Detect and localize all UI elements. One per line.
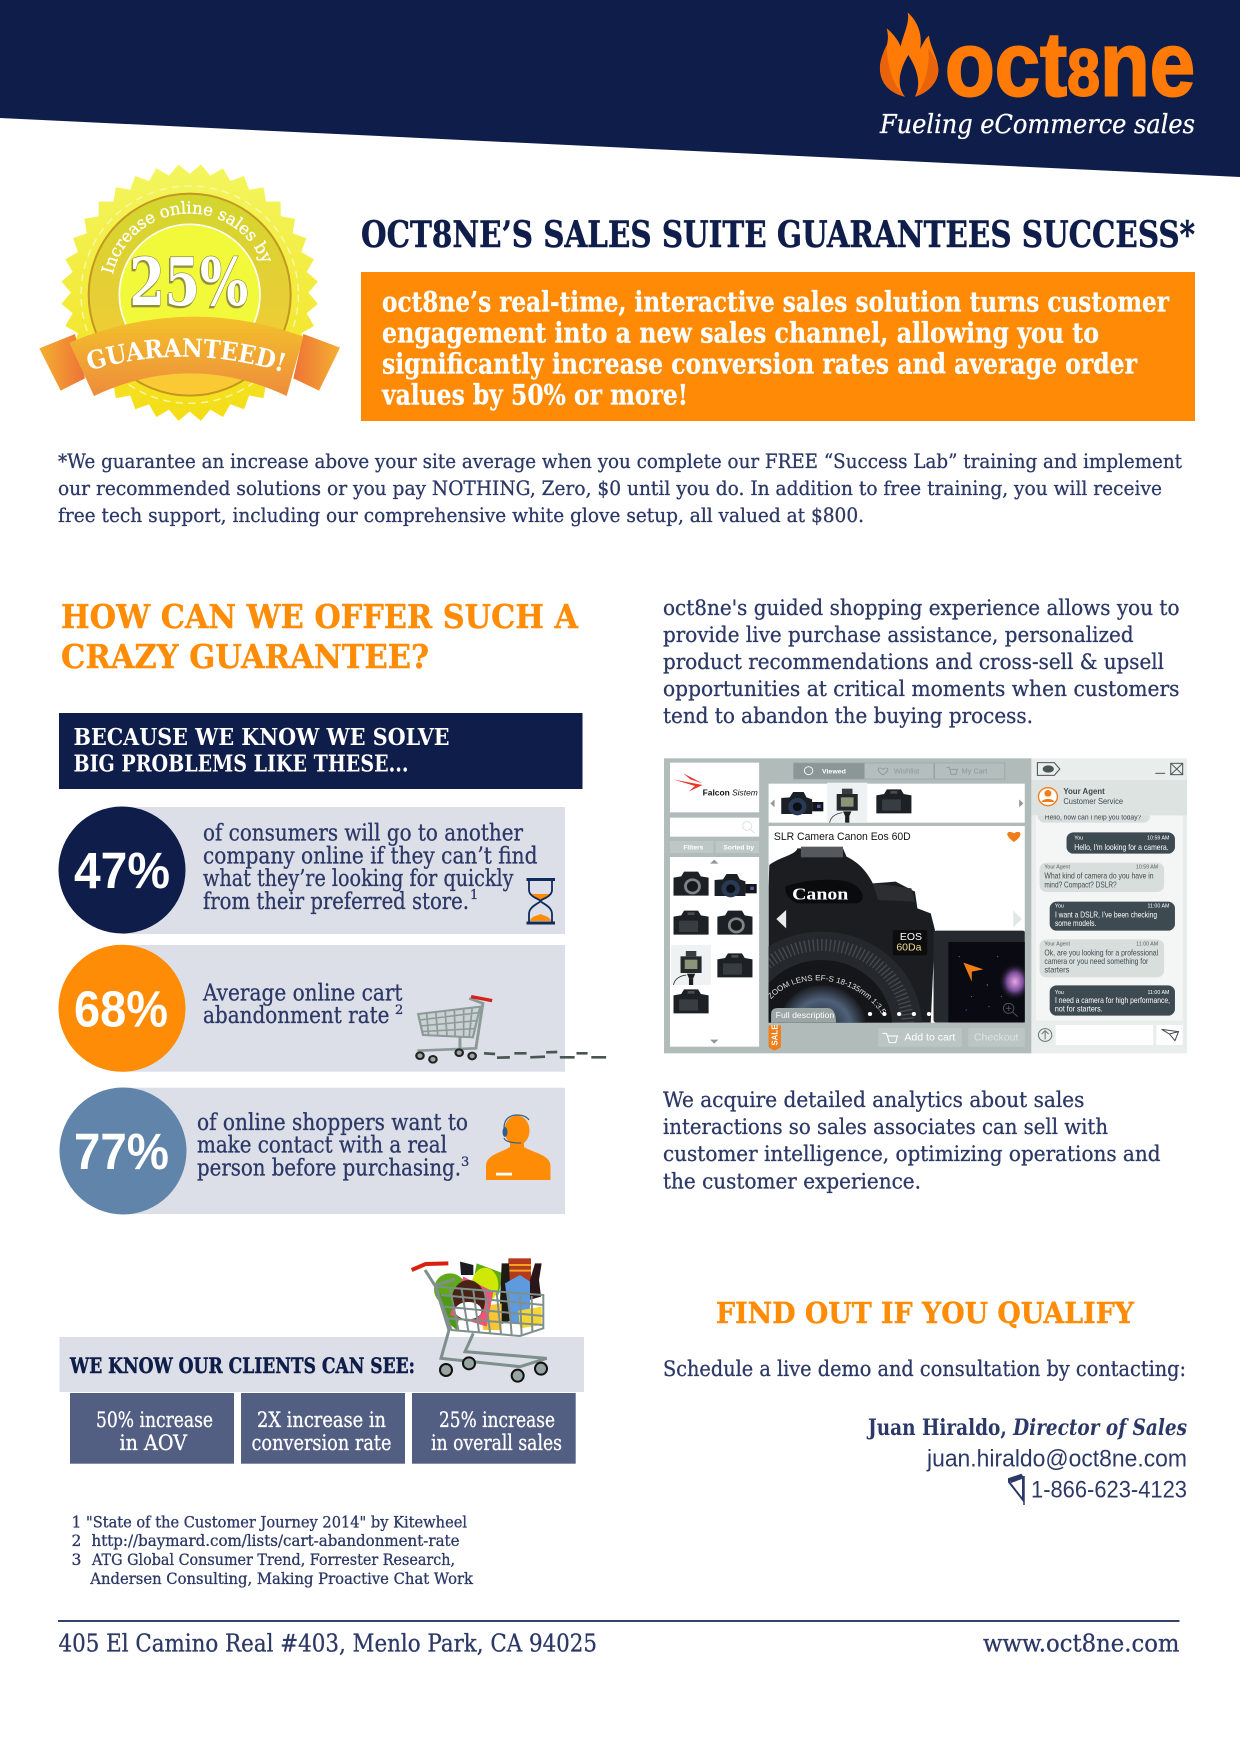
thumbnail list <box>670 857 759 1047</box>
stat text: of consumers will go to another <box>203 821 523 847</box>
agent bubble: 11:00 AM <box>1136 942 1158 948</box>
lens <box>768 932 922 1023</box>
product title: SLR Camera Canon Eos 60D <box>774 831 911 843</box>
navy problems banner: BIG PROBLEMS LIKE THESE... <box>74 751 408 778</box>
result box: overall sales: in overall sales <box>431 1431 562 1455</box>
guarantee footnote paragraph <box>58 449 1182 527</box>
icon: full shopping cart <box>412 1258 547 1382</box>
clients results panel <box>60 1337 584 1464</box>
qualify heading: FIND OUT IF YOU QUALIFY <box>716 1296 1134 1330</box>
sale tag <box>769 1024 781 1051</box>
sale tag: SALE <box>771 1024 780 1046</box>
references footnotes: ATG Global Consumer Trend, Forrester Research, <box>91 1551 455 1569</box>
icon: hourglass <box>526 878 555 924</box>
guided shopping paragraph: opportunities at critical moments when customers <box>663 677 1180 702</box>
stat text: Average online cart <box>202 981 403 1007</box>
stat text: of online shoppers want to <box>197 1110 468 1136</box>
icon: flame <box>880 12 938 97</box>
checkout button <box>968 1028 1025 1047</box>
demo invitation: Schedule a live demo and consultation by contacting: <box>663 1357 1186 1381</box>
references footnotes: http://baymard.com/lists/cart-abandonment-rate <box>92 1532 460 1550</box>
agent bubble: camera or you need something for <box>1044 957 1149 966</box>
result box: conversion rate <box>241 1393 405 1464</box>
stat number: 68% <box>74 981 168 1038</box>
analytics paragraph: We acquire detailed analytics about sales <box>663 1088 1084 1113</box>
tab bar: Viewed <box>822 769 846 776</box>
checkout button: Checkout <box>974 1032 1019 1044</box>
full description pill <box>771 1008 836 1023</box>
customer bubble: 10:59 AM <box>1147 835 1169 841</box>
stat number: 77% <box>74 1123 169 1180</box>
tab bar <box>793 763 1005 779</box>
references footnotes: 3 <box>72 1551 81 1569</box>
navy problems banner <box>59 713 582 789</box>
customer bubble <box>1050 902 1175 931</box>
dashed stitch ring <box>81 186 298 403</box>
zoom icon <box>1003 1003 1018 1017</box>
customer bubble: 11:00 AM <box>1148 990 1169 996</box>
analytics paragraph: the customer experience. <box>663 1170 921 1194</box>
customer bubble: I need a camera for high performance, <box>1055 996 1170 1005</box>
customer bubble: You <box>1074 835 1083 841</box>
flip screen <box>934 931 1025 1023</box>
analytics paragraph <box>663 1088 1161 1194</box>
stat row: 77% <box>60 1088 565 1214</box>
chat panel <box>1032 758 1187 1053</box>
stat text <box>202 981 403 1029</box>
stat text: abandonment rate <box>203 1003 390 1029</box>
icon: support agent <box>486 1115 550 1180</box>
agent bubble: Your Agent <box>1044 942 1071 948</box>
stat text: person before purchasing. <box>197 1156 461 1182</box>
full description pill: Full description <box>776 1010 834 1020</box>
stat text: company online if they can’t find <box>203 843 538 869</box>
result box: overall sales <box>412 1393 576 1464</box>
analytics paragraph: interactions so sales associates can sell with <box>663 1115 1108 1140</box>
section heading: crazy guarantee <box>61 597 578 676</box>
ribbon left tail <box>39 334 85 391</box>
guided shopping paragraph: oct8ne's guided shopping experience allows you to <box>663 596 1180 621</box>
footer website: www.oct8ne.com <box>983 1630 1180 1658</box>
stat circle <box>58 806 186 934</box>
customer bubble: not for starters. <box>1055 1005 1103 1014</box>
logo wordmark: oct8ne <box>945 14 1195 116</box>
tab bar: My Cart <box>962 768 987 776</box>
result box: AOV <box>70 1393 234 1464</box>
orange intro panel: values by 50% or more! <box>381 378 688 412</box>
stat row: 47% <box>58 806 565 934</box>
footer address: 405 El Camino Real #403, Menlo Park, CA 94025 <box>58 1630 597 1658</box>
filter buttons: Sorted by <box>723 844 754 851</box>
model badge: EOS <box>900 932 922 943</box>
stat text <box>203 821 538 915</box>
add to cart button: Add to cart <box>904 1032 955 1044</box>
guarantee seal badge <box>39 164 340 421</box>
stat text: what they’re looking for quickly <box>203 866 514 892</box>
navy problems banner: BECAUSE WE KNOW WE SOLVE <box>74 724 450 751</box>
agent bubble: starters <box>1044 966 1069 975</box>
result box: AOV: in AOV <box>120 1431 188 1455</box>
first agent bubble: Hello, how can I help you today? <box>1045 813 1141 821</box>
section heading: crazy guarantee: HOW CAN WE OFFER SUCH A <box>61 597 578 636</box>
first agent bubble <box>1038 815 1150 822</box>
orange intro panel <box>361 272 1195 421</box>
ribbon band <box>69 317 303 396</box>
chat top controls <box>1037 763 1183 775</box>
results band <box>60 1337 584 1392</box>
references footnotes: Andersen Consulting, Making Proactive Chat Work <box>89 1570 474 1588</box>
footer rule <box>58 1620 1180 1622</box>
agent bubble: Your Agent <box>1044 865 1071 871</box>
guided shopping paragraph: tend to abandon the buying process. <box>663 704 1033 729</box>
stat text: from their preferred store. <box>203 889 469 915</box>
customer bubble: 11:00 AM <box>1148 904 1169 910</box>
stat text: make contact with a real <box>197 1133 447 1159</box>
result box: overall sales: 25% increase <box>439 1408 555 1432</box>
guided shopping paragraph: product recommendations and cross-sell & upsell <box>663 650 1164 675</box>
agent bubble: 10:59 AM <box>1136 865 1158 871</box>
agent header <box>1032 780 1187 815</box>
25 percent figure: 25% <box>129 245 248 321</box>
stat circle <box>60 1088 186 1214</box>
curved seal text: Increase online sales by <box>101 200 271 274</box>
brand logo box: Falcon Sistem <box>703 789 758 797</box>
agent bubble: What kind of camera do you have in <box>1044 872 1154 881</box>
agent bubble: Ok, are you looking for a professional <box>1044 949 1158 958</box>
stat text: 3 <box>461 1155 469 1170</box>
chat input row <box>1038 1025 1183 1045</box>
icon: phone <box>1009 1475 1024 1505</box>
contact details: Juan Hiraldo, Director of Sales <box>866 1415 1187 1441</box>
ribbon text: GUARANTEED! <box>87 338 286 372</box>
logo tagline: Fueling eCommerce sales <box>879 110 1195 140</box>
stat row: 68% <box>58 945 606 1072</box>
stat circle <box>58 945 186 1072</box>
logo <box>879 12 1195 140</box>
agent header: Customer Service <box>1063 797 1123 806</box>
agent bubble <box>1040 939 1164 977</box>
references footnotes: 2 <box>72 1532 81 1550</box>
filter buttons <box>670 841 759 853</box>
image arrows <box>776 910 786 928</box>
customer bubble: You <box>1055 990 1064 996</box>
agent bubble <box>1040 863 1164 892</box>
orange intro panel: engagement into a new sales channel, allowing you to <box>382 316 1099 350</box>
seal starburst <box>56 159 323 426</box>
search box <box>670 818 759 837</box>
result box: conversion rate: conversion rate <box>252 1431 392 1455</box>
header banner <box>0 0 1240 177</box>
references footnotes: 1 <box>72 1513 81 1531</box>
stat text: 2 <box>395 1003 403 1018</box>
stat text <box>197 1110 469 1182</box>
guarantee footnote paragraph: free tech support, including our comprehensive white glove setup, all valued at $800. <box>58 503 864 527</box>
contact details: 1-866-623-4123 <box>1031 1477 1187 1504</box>
customer bubble: You <box>1055 904 1064 910</box>
guided shopping paragraph: provide live purchase assistance, personalized <box>663 623 1134 648</box>
tab bar: Wishlist <box>894 768 919 776</box>
product view <box>768 826 1025 1023</box>
customer bubble: I want a DSLR, I've been checking <box>1055 911 1157 920</box>
contact details: juan.hiraldo@oct8ne.com <box>926 1446 1187 1473</box>
model badge <box>893 930 927 955</box>
carousel dots <box>868 1012 931 1016</box>
agent bubble: mind? Compact? DSLR? <box>1044 881 1117 890</box>
add to cart button <box>878 1028 962 1047</box>
contact details <box>866 1415 1187 1505</box>
customer bubble <box>1067 832 1175 854</box>
product screenshot mockup <box>664 758 1187 1054</box>
recently viewed strip <box>769 783 1025 823</box>
ribbon right tail <box>293 334 340 391</box>
lens lettering: ZOOM LENS EF-S 18-135mm 1:3.5-5.6 <box>768 975 886 1014</box>
chat conversation <box>1036 807 1183 1021</box>
brand lettering: Canon <box>792 884 848 903</box>
cursor arrow <box>963 963 983 982</box>
result box: AOV: 50% increase <box>96 1408 213 1432</box>
model badge: 60Da <box>896 943 922 954</box>
section heading: crazy guarantee: CRAZY GUARANTEE? <box>61 637 429 676</box>
seal ring <box>89 194 291 396</box>
seal centre <box>119 224 260 365</box>
brand logo box <box>670 763 759 812</box>
filter buttons: Filters <box>683 844 704 851</box>
guarantee footnote paragraph: our recommended solutions or you pay NOTHING, Zero, $0 until you do. In addition to free training, you will receive <box>58 476 1162 500</box>
stat number: 47% <box>74 842 170 899</box>
analytics paragraph: customer intelligence, optimizing operations and <box>663 1142 1161 1167</box>
camera body <box>769 848 935 1023</box>
references footnotes: "State of the Customer Journey 2014" by Kitewheel <box>86 1513 467 1531</box>
customer bubble <box>1050 985 1175 1016</box>
stat text: 1 <box>470 888 478 903</box>
icon: heart <box>1007 832 1020 842</box>
references footnotes <box>72 1513 474 1588</box>
result box: conversion rate: 2X increase in <box>257 1408 386 1432</box>
icon: abandoned cart with trail <box>416 997 606 1063</box>
agent header: Your Agent <box>1063 787 1105 796</box>
customer bubble: some models. <box>1055 919 1096 928</box>
customer bubble: Hello, I'm looking for a camera. <box>1074 843 1169 852</box>
shop panel <box>664 758 1031 1053</box>
guided shopping paragraph <box>663 596 1180 729</box>
results heading: WE KNOW OUR CLIENTS CAN SEE: <box>69 1353 415 1378</box>
